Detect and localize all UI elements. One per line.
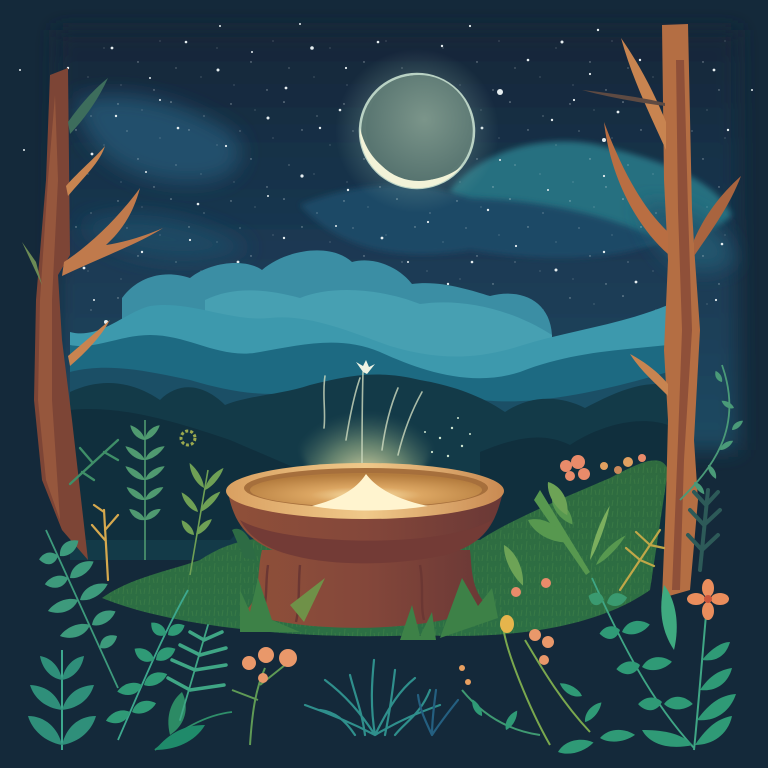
right orange flower [687,579,729,620]
yellow sprig [620,530,664,590]
far mountains [70,305,668,420]
bowl body [228,492,503,563]
star dust [70,40,730,320]
steam [300,360,432,496]
bowl base [244,550,488,628]
foreground orange flower sprig [232,647,297,745]
left midground ferns [70,420,226,580]
mound grass over bowl [232,529,498,640]
night sky [56,30,738,450]
grass mound [102,460,668,636]
foreground lower right sprigs [459,615,635,757]
right midground plants [500,478,627,588]
right tree branches [621,38,666,150]
liquid [250,473,482,507]
foreground center-left plant [104,590,232,750]
dark tree line [70,375,668,560]
bowl [226,463,504,628]
bowl rim [226,463,504,519]
sparkles [424,417,471,457]
foreground right plant [587,578,736,750]
sky clouds [75,95,736,271]
right vine [680,365,744,500]
foreground left fern [38,530,120,688]
orange flowers cluster [511,454,646,597]
left tree branches [66,146,105,196]
bright clouds [122,250,552,400]
grass texture [102,460,668,636]
moon crescent [360,128,462,188]
stars [19,23,753,324]
right dark fern [688,490,720,570]
foreground left bottom plant [28,650,96,750]
dark grass tuft [305,660,458,735]
sprout flower [356,360,375,374]
steam wisps [324,372,422,470]
foreground fern [168,625,226,720]
left tree [22,68,163,560]
moon [335,49,499,213]
right tree [582,24,741,598]
